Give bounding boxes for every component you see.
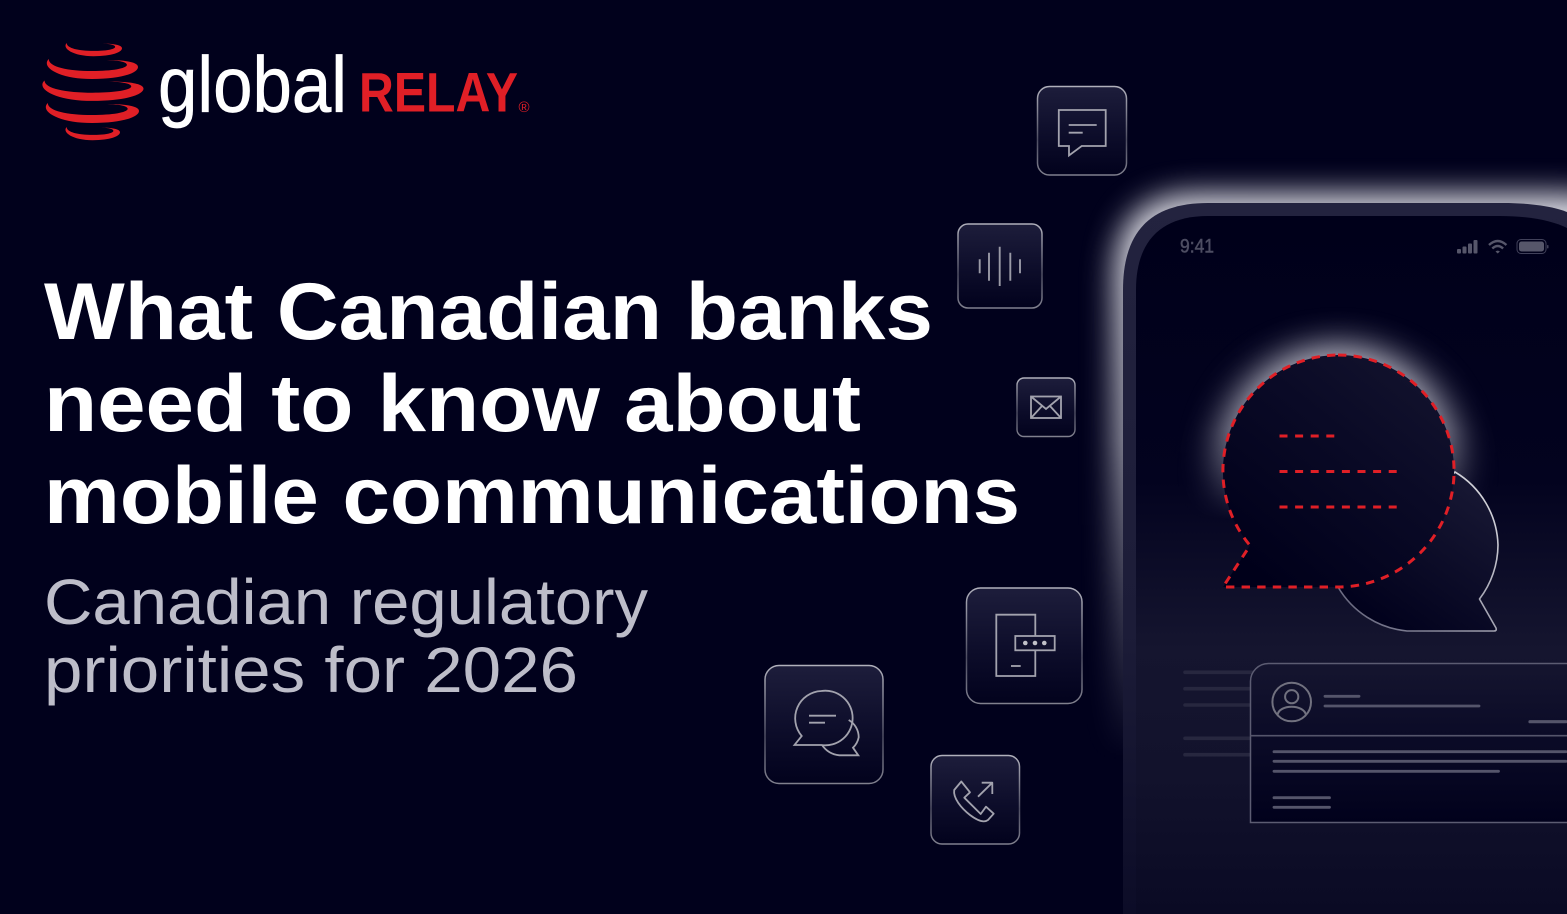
icon: red swirl globe [42, 43, 143, 140]
icon tile: phone with passcode [966, 588, 1082, 704]
message card [1250, 663, 1567, 822]
status bar icons [1457, 240, 1548, 254]
icon: battery [1517, 240, 1548, 254]
icon tile: outgoing call [931, 756, 1020, 844]
card divider [1250, 735, 1567, 737]
rear chat bubble [1338, 472, 1498, 631]
title: What Canadian banks [44, 267, 933, 357]
icon tile: conversation bubbles [765, 666, 883, 784]
phone mockup [1123, 203, 1567, 914]
title: mobile communications [44, 451, 1020, 541]
icon: wifi [1489, 241, 1506, 254]
icon: signal bars [1457, 240, 1478, 254]
subtitle: priorities for 2026 [44, 634, 578, 706]
registered mark: ® [518, 99, 530, 116]
background text lines [1185, 672, 1252, 755]
card body [1250, 663, 1567, 822]
phone screen [1136, 216, 1567, 914]
wordmark: RELAY: RELAY [359, 60, 518, 124]
icon tile: message bubble [1038, 86, 1126, 175]
title [44, 267, 1020, 541]
card text lines [1274, 696, 1566, 807]
wordmark: global: global [158, 40, 347, 128]
title: need to know about [44, 359, 861, 449]
subtitle: Canadian regulatory [44, 566, 648, 638]
icon: user avatar [1272, 683, 1311, 721]
phone frame [1123, 203, 1567, 914]
bubble text lines [1280, 436, 1398, 507]
status bar time: 9:41 [1180, 236, 1214, 258]
phone glow [1090, 170, 1567, 732]
bubble outline [1223, 355, 1454, 587]
icon tile: envelope [1017, 378, 1075, 436]
main dashed chat bubble [1223, 355, 1454, 587]
logo: Global Relay [42, 40, 530, 140]
icon tile: audio waveform [958, 224, 1042, 308]
subtitle [44, 566, 648, 706]
chat bubble glow [1194, 320, 1482, 511]
